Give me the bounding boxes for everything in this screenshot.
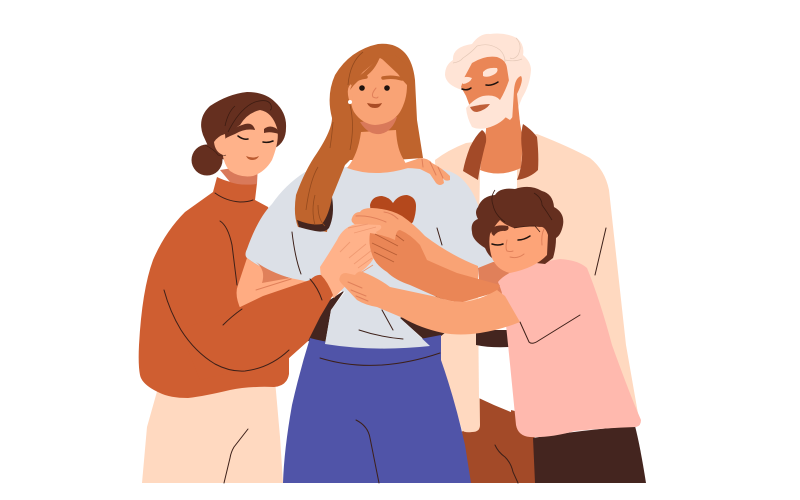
blue trousers: [283, 335, 471, 483]
left woman head: [192, 92, 286, 185]
central woman face: [348, 55, 413, 125]
central woman right hand and arm: [352, 208, 478, 285]
grandfather hand and arm: [369, 230, 500, 302]
figure: central woman: [237, 44, 494, 483]
figure: grandfather: [435, 34, 640, 483]
dark top under shirt: [308, 270, 446, 345]
central woman hair back: [295, 44, 423, 232]
beige trousers: [142, 380, 283, 483]
central woman neck: [347, 130, 408, 173]
left woman hand: [164, 224, 381, 380]
pink shirt: [498, 259, 641, 437]
central woman hand on shoulder: [405, 158, 450, 185]
boy neck: [478, 262, 540, 295]
boy head: [472, 187, 563, 273]
grandfather head: [445, 34, 531, 129]
brown sweater: [139, 177, 308, 398]
central woman left arm: [237, 258, 325, 310]
grey shirt: [246, 167, 494, 349]
boy dark trousers: [533, 426, 646, 483]
figure: woman on the left: [139, 92, 308, 483]
figure: boy: [339, 187, 646, 483]
heart: [370, 195, 416, 240]
left woman sleeve: [180, 275, 333, 380]
boy arm and hand: [339, 271, 520, 334]
